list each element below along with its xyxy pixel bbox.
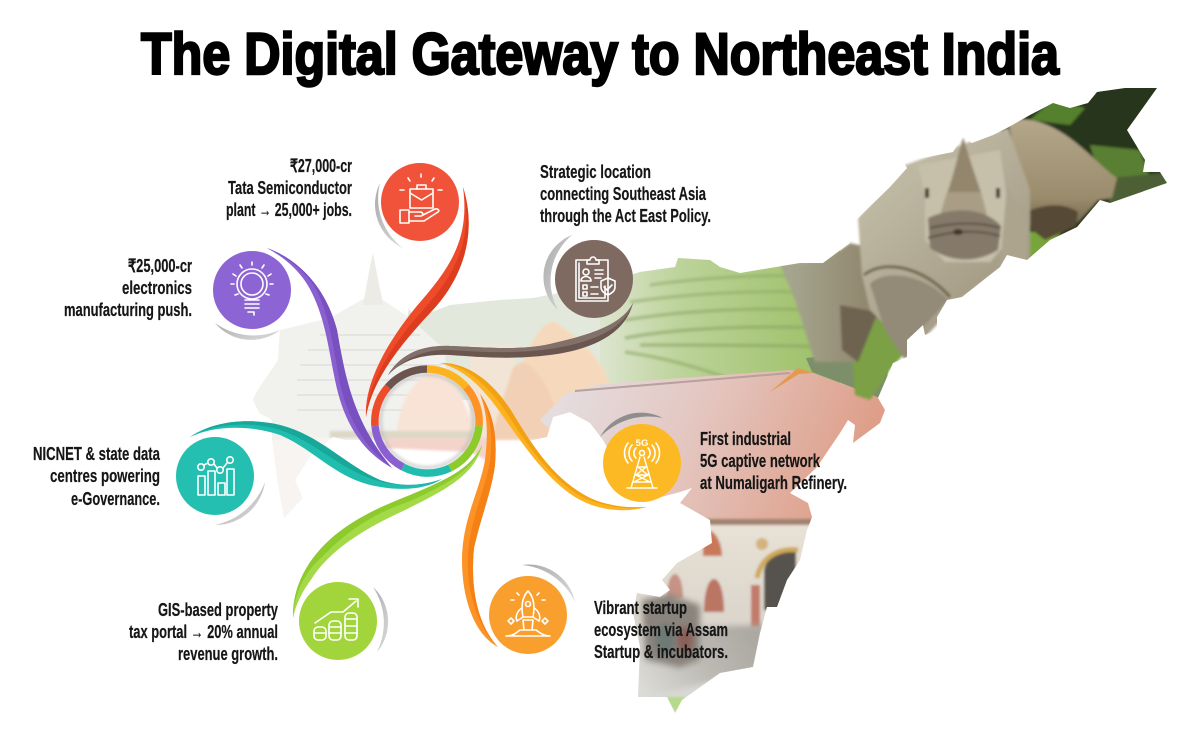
text: startup ecosystem: Vibrant startup	[594, 598, 687, 618]
text: startup ecosystem	[594, 598, 728, 662]
icon disc: brown	[555, 240, 633, 318]
text: data centres: centres powering	[50, 466, 160, 486]
text: strategic location: through the Act East Policy.	[540, 206, 711, 226]
icon disc: purple	[213, 251, 291, 329]
rhino scene	[780, 80, 1175, 400]
temple wall with arches	[633, 518, 812, 713]
hind body of rhino	[780, 243, 885, 362]
main rhino body	[858, 128, 1030, 360]
ribbon: yellow	[440, 363, 647, 510]
text: data centres	[33, 444, 161, 509]
icon: light bulb	[231, 262, 273, 315]
text: data centres: NICNET & state data	[33, 444, 161, 464]
faded left temple dome	[253, 250, 450, 518]
icon: 5G tower: 5G	[636, 438, 648, 449]
text: tata semiconductor: Tata Semiconductor	[228, 178, 352, 198]
faint hills	[408, 270, 649, 400]
ribbon: orange	[462, 394, 498, 647]
text: startup ecosystem: ecosystem via Assam	[594, 620, 728, 640]
node: tata semiconductor	[375, 163, 459, 248]
ribbon: purple	[267, 248, 392, 468]
ribbon: teal	[190, 421, 442, 489]
node: startup ecosystem	[489, 564, 575, 654]
node: electronics	[213, 251, 291, 340]
crescent shadow	[215, 482, 265, 525]
icon disc: red	[381, 163, 459, 241]
text: GIS portal: GIS-based property	[158, 600, 278, 620]
rhino face	[918, 150, 1007, 262]
icon disc: teal	[176, 437, 254, 515]
ribbon: brown	[388, 303, 633, 375]
crescent shadow	[543, 235, 572, 310]
icon disc: orange	[489, 576, 567, 654]
crescent shadow	[600, 413, 663, 437]
rhino right flank	[1004, 198, 1008, 223]
roof finial	[770, 368, 813, 392]
ribbon: green	[293, 445, 482, 618]
text: tata semiconductor: plant → 25,000+ jobs.	[226, 200, 352, 220]
text: 5G network: First industrial	[700, 429, 791, 449]
text: electronics manufacturing: ₹25,000-cr	[128, 256, 192, 276]
crescent shadow	[375, 183, 403, 248]
rhino foreleg	[870, 275, 948, 360]
node: 5G network	[600, 413, 681, 502]
ground and people	[636, 592, 762, 689]
icon: rocket launch	[506, 591, 550, 636]
text: tata semiconductor	[226, 156, 352, 220]
node: strategic location	[543, 235, 633, 318]
text: 5G network: 5G captive network	[700, 451, 821, 471]
crescent shadow	[215, 323, 280, 340]
central ring	[375, 369, 479, 473]
text: GIS portal	[129, 600, 278, 664]
icon: clipboard with shield	[576, 257, 615, 301]
node: GIS property tax	[299, 582, 388, 660]
text: strategic location: connecting Southeast Asia	[540, 184, 707, 204]
icon: coins with arrow	[314, 599, 358, 640]
text: startup ecosystem: Startup & incubators.	[594, 642, 728, 662]
tea garden	[600, 250, 840, 383]
icon disc: green	[299, 582, 377, 660]
crescent shadow	[522, 564, 575, 602]
text: data centres: e-Governance.	[71, 489, 160, 509]
text: electronics manufacturing: manufacturing push.	[64, 300, 192, 320]
icon: bar chart with line	[198, 457, 234, 495]
icon: hand with briefcase	[400, 174, 442, 223]
tree behind roof	[806, 357, 888, 398]
grass below rhino	[850, 300, 912, 400]
text: strategic location: Strategic location	[540, 162, 651, 182]
ribbon: red	[366, 187, 469, 417]
rhino horn	[947, 137, 981, 194]
dark forest backdrop	[1000, 88, 1162, 238]
node: data centres	[176, 437, 265, 525]
crescent shadow	[373, 587, 388, 652]
map of Assam with photo collage	[253, 80, 1175, 720]
second rhino	[1008, 119, 1117, 238]
pink roof	[540, 370, 900, 530]
text: 5G network	[700, 429, 847, 493]
text: GIS portal: revenue growth.	[178, 644, 278, 664]
text: tata semiconductor: ₹27,000-cr	[290, 156, 352, 176]
title: The Digital Gateway to Northeast India	[141, 22, 1060, 87]
text: electronics manufacturing: electronics	[122, 278, 192, 298]
text: strategic location	[540, 162, 711, 226]
rhino muzzle	[928, 210, 1001, 260]
text: 5G network: at Numaligarh Refinery.	[700, 473, 847, 493]
text: GIS portal: tax portal → 20% annual	[129, 622, 278, 642]
text: electronics manufacturing	[64, 256, 192, 320]
rhino nose ridge	[940, 192, 987, 215]
icon disc: yellow	[603, 424, 681, 502]
orange temple domes	[330, 322, 610, 462]
